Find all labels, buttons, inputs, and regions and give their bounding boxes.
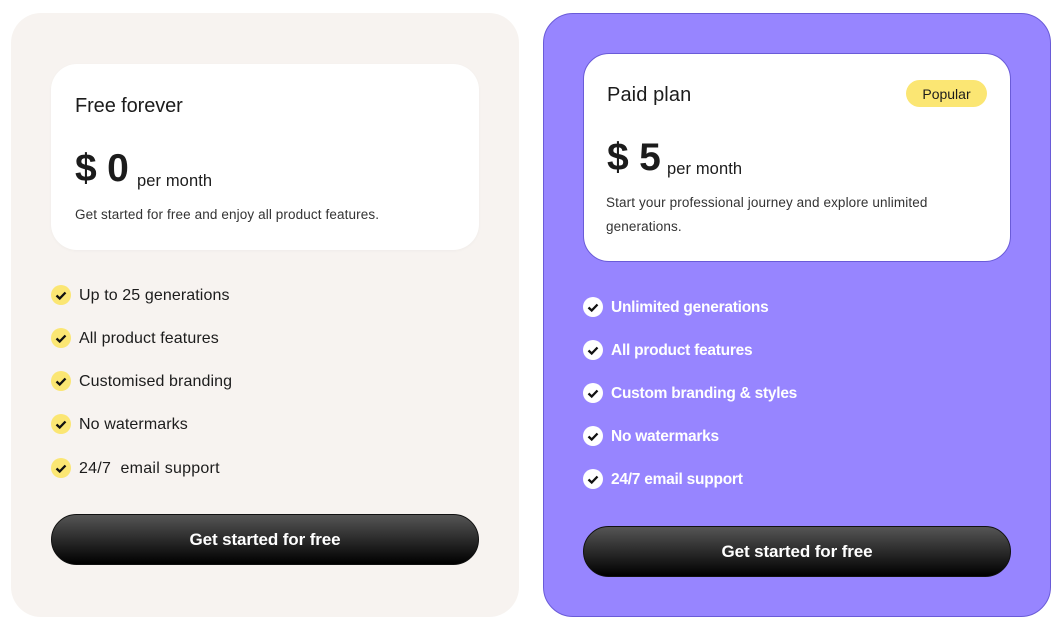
icon: white check (583, 426, 603, 446)
feature: all product features (583, 340, 752, 360)
button: get started, paid plan: Get started for free (721, 542, 873, 561)
icon: yellow check (51, 371, 71, 391)
heading: paid plan: Paid plan (607, 84, 691, 106)
icon: white check (583, 297, 603, 317)
price: $0: $ 0 (75, 147, 129, 190)
feature: customised branding (51, 371, 232, 391)
description: paid plan: generations. (606, 219, 682, 234)
feature text: All product features (611, 342, 752, 359)
icon: yellow check (51, 285, 71, 305)
icon: white check (583, 340, 603, 360)
feature: custom branding and styles (583, 383, 797, 403)
card: paid plan summary (583, 53, 1011, 262)
feature: unlimited generations (583, 297, 769, 317)
feature text: 24/7 email support (611, 471, 743, 488)
feature: email support (583, 469, 743, 489)
description: free plan: Get started for free and enjoy all product features. (75, 207, 379, 222)
card: free plan summary (51, 64, 479, 250)
badge: popular: Popular (922, 86, 971, 102)
feature: no watermarks (583, 426, 719, 446)
heading: free forever: Free forever (75, 95, 183, 117)
icon: yellow check (51, 328, 71, 348)
button: get started, paid plan (583, 526, 1011, 577)
feature: all product features (51, 328, 219, 348)
feature text: No watermarks (611, 428, 719, 445)
panel: free plan (11, 13, 519, 617)
feature: email support (51, 458, 220, 478)
feature text: Unlimited generations (611, 299, 769, 316)
price: $5: $ 5 (607, 136, 661, 179)
panel: paid plan (543, 13, 1051, 617)
button: get started, free plan: Get started for free (189, 530, 341, 549)
price unit: per month: per month (667, 160, 742, 178)
feature: no watermarks (51, 414, 188, 434)
price unit: per month: per month (137, 172, 212, 190)
feature text: All product features (79, 330, 219, 347)
icon: yellow check (51, 414, 71, 434)
button: get started, free plan (51, 514, 479, 565)
feature text: 24/7 email support (79, 460, 220, 477)
description: paid plan (606, 195, 928, 234)
icon: white check (583, 383, 603, 403)
feature text: Customised branding (79, 373, 232, 390)
icon: yellow check (51, 458, 71, 478)
feature text: Custom branding & styles (611, 385, 797, 402)
feature: up to 25 generations (51, 285, 230, 305)
description: paid plan: Start your professional journey and explore unlimited (606, 195, 928, 210)
badge: popular (906, 80, 987, 107)
feature text: No watermarks (79, 416, 188, 433)
feature text: Up to 25 generations (79, 287, 230, 304)
icon: white check (583, 469, 603, 489)
